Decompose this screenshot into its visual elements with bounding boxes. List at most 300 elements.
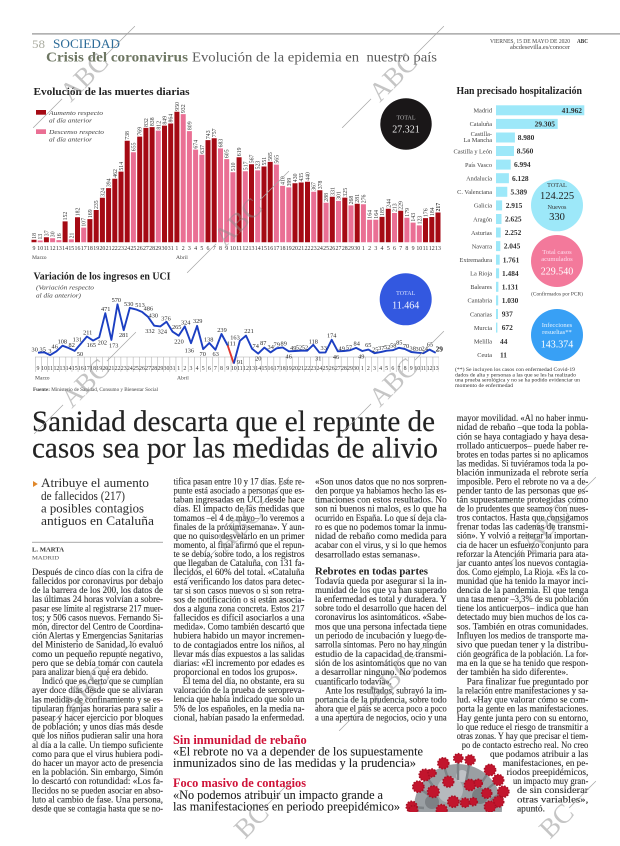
- value labels: 838: [150, 117, 156, 126]
- ICU value labels: 471: [101, 306, 110, 313]
- body column 3: munidad de los que ya han superado: [315, 585, 447, 595]
- body column 1: fallecidos por coronavirus por debajo: [32, 576, 163, 586]
- ICU value labels: 118: [309, 338, 318, 345]
- bar chart: regions: 11: [500, 350, 507, 359]
- value labels: 281: [355, 194, 361, 203]
- date axis: 12: [429, 246, 435, 252]
- date axis: 15: [68, 246, 74, 252]
- body column 1: ción Alertas y Emergencias Sanitarias: [32, 631, 163, 641]
- body column 1: lo descartó con rotundidad: «Los fa-: [32, 776, 163, 786]
- value labels: 637: [200, 145, 206, 154]
- value labels: 325: [343, 188, 349, 197]
- body column 4: Influyen los medios de transporte ma-: [457, 631, 588, 641]
- value labels: 179: [405, 208, 411, 217]
- body column 3: a desarrollar ninguno. No podemos: [315, 667, 447, 677]
- value labels: 523: [256, 161, 262, 169]
- bar chart: regions: 5.389: [510, 187, 527, 196]
- date axis: 15: [261, 246, 267, 252]
- ICU value labels: 530: [124, 301, 133, 308]
- bar chart: regions: Baleares: [470, 284, 493, 291]
- total ICU circle: 11.464: [392, 300, 419, 311]
- ICU date axis: 23: [310, 366, 316, 372]
- value labels: 585: [268, 152, 274, 161]
- value labels: 394: [107, 178, 113, 187]
- ICU value labels: 24: [422, 345, 429, 352]
- callout: foco masivo: [173, 776, 400, 814]
- ICU value labels: 63: [213, 351, 219, 358]
- date axis: 12: [242, 246, 248, 252]
- source: Fuente: Ministerio de Sanidad, Consumo y Bienestar Social: [33, 387, 159, 393]
- date axis: 13: [56, 246, 62, 252]
- ICU value labels: 58: [390, 342, 396, 349]
- body column 4: de lo prudentes que seamos con nues-: [457, 504, 588, 514]
- body column 4: sión». Y volvió a reiterar la importan-: [457, 531, 588, 541]
- ICU value labels: 30: [32, 346, 38, 353]
- ICU value labels: 220: [174, 338, 184, 345]
- ICU date axis: 10: [231, 366, 237, 372]
- ICU date axis: 6: [391, 366, 394, 372]
- value labels: 213: [392, 203, 398, 212]
- ICU date axis: 10: [414, 366, 420, 372]
- ICU date axis: 11: [47, 366, 53, 372]
- watermarks: BC: [533, 797, 580, 844]
- body column 4: ción se haya contagiado y haya desa-: [457, 431, 588, 441]
- body column 4: munidad que ha tenido la mayor inci-: [457, 576, 588, 586]
- ICU value labels: 57: [346, 344, 352, 351]
- ICU value labels: 430: [149, 313, 158, 320]
- date axis: 6: [207, 246, 210, 252]
- value labels: 430: [293, 173, 299, 182]
- ICU date axis: 29: [347, 366, 353, 372]
- value labels: 30: [51, 231, 57, 237]
- note: ICU: (Variación respecto: [36, 285, 95, 292]
- panel: ICU admissions: [32, 272, 443, 393]
- ICU value labels: 89: [281, 340, 287, 347]
- body column 2: punte está asociado a personas que es-: [174, 486, 304, 496]
- body column 4: porta la gente en las manifestaciones.: [457, 704, 588, 714]
- body column 1: ayer doce días desde que se aliviaran: [32, 685, 163, 695]
- section title: Crisis del coronavirus: [46, 50, 189, 66]
- body column 3: Todavía queda por asegurar si la in-: [315, 576, 447, 586]
- ICU date axis: 18: [280, 366, 286, 372]
- value labels: 18: [32, 233, 38, 239]
- watermarks: ABC: [515, 498, 575, 558]
- value labels: 510: [231, 162, 237, 171]
- bar chart: regions: 937: [502, 310, 513, 319]
- value labels: 276: [361, 195, 367, 203]
- body column 4: las medidas. Si tuviéramos toda la po-: [457, 458, 588, 468]
- ICU value labels: 74: [253, 343, 260, 350]
- body column 1: pasar ese límite al registrarse 217 muer-: [32, 603, 163, 613]
- body column 3: ocurrido en España. Lo que sí deja cla-: [315, 513, 447, 523]
- ICU value labels: 211: [83, 330, 92, 337]
- date axis: 23: [311, 246, 317, 252]
- date axis: 29: [348, 246, 354, 252]
- value labels: 123: [417, 216, 423, 224]
- date axis: 25: [130, 246, 136, 252]
- note: ICU: [36, 285, 95, 299]
- ICU value labels: 163: [230, 335, 240, 342]
- circle: total hospitalised: [531, 179, 583, 231]
- subheadline: [33, 476, 154, 528]
- ICU date axis: Abril: [177, 376, 189, 382]
- body column 4: otras zonas. Y hay que precisar el tiem-: [457, 731, 588, 741]
- bar chart: regions: 1.761: [503, 255, 520, 264]
- circle: total cases: [531, 235, 583, 287]
- circle: total hospitalised: TOTAL: [547, 182, 567, 189]
- body column 3: estudio de la capacidad de transmi-: [315, 649, 447, 659]
- bar chart: regions: 8.560: [517, 147, 534, 156]
- date axis: 20: [292, 246, 298, 252]
- ICU value labels: 52: [296, 344, 302, 351]
- date axis: 10: [416, 246, 422, 252]
- watermarks: ABC: [55, 660, 115, 720]
- bar chart: regions: País Vasco: [465, 162, 492, 169]
- body column 3: coronavirus los asintomáticos. «Sabe-: [315, 612, 447, 622]
- body column 4: Para finalizar fue preguntado por: [467, 676, 588, 686]
- bar chart: regions: Canarias: [470, 311, 493, 318]
- header: section bar: ABC: [577, 39, 588, 45]
- icon: coronavirus: [406, 752, 510, 812]
- ICU date axis: 21: [108, 366, 114, 372]
- callout: sin inmunidad: [173, 733, 423, 770]
- body column 4: frenar todas las cadenas de transmi-: [457, 522, 588, 532]
- ICU date axis: 16: [268, 366, 274, 372]
- body column 2: [174, 476, 305, 722]
- bar chart: regions: Navarra: [472, 243, 492, 250]
- ICU value labels: 239: [217, 327, 227, 334]
- value labels: 462: [113, 169, 119, 178]
- body column 1: món, director del Centro de Coordina-: [32, 622, 163, 632]
- body column 2: proporcional en todos los grupos».: [174, 667, 298, 677]
- body column 4: de sin considerar: [517, 785, 588, 795]
- ICU date axis: Marzo: [35, 376, 50, 382]
- ICU value labels: 174: [327, 332, 337, 339]
- bar chart: regions: La Rioja: [470, 271, 492, 278]
- bar chart: regions: 1.484: [502, 269, 519, 278]
- value labels: 301: [336, 191, 342, 200]
- body column 4: der también ha sido diferente».: [457, 667, 568, 677]
- date axis: 28: [342, 246, 348, 252]
- body column 2: que no quiso desvelarlo en un primer: [174, 531, 304, 541]
- panel: hospitalised: [454, 86, 584, 389]
- value labels: 435: [299, 173, 305, 182]
- ICU date axis: 2: [367, 366, 370, 372]
- body column 4: lo que reduce el riesgo de transmitir a: [457, 722, 588, 732]
- bar chart: regions: 6.128: [512, 174, 529, 183]
- date axis: 2: [368, 246, 371, 252]
- ICU value labels: 65: [365, 342, 371, 349]
- value labels: 143: [411, 213, 417, 222]
- legend: Aumento respecto: [48, 110, 104, 117]
- body column 4: dos. Como ejemplo, La Rioja. «Es la co-: [457, 567, 588, 577]
- bar chart: daily deaths: [32, 102, 442, 261]
- legend: Descenso respecto: [48, 129, 105, 136]
- date axis: 13: [249, 246, 254, 252]
- body column 4: mayor movilidad. «Al no haber inmu-: [457, 413, 588, 423]
- icon: arrow: [33, 481, 38, 487]
- ICU value labels: 31: [315, 355, 321, 362]
- body column 2: llecidos, el 60% del total. «Cataluña: [174, 567, 304, 577]
- ICU date axis: 22: [115, 366, 120, 372]
- value labels: 288: [324, 193, 330, 202]
- body column 4: sivo que puedan tener y la distribu-: [457, 640, 588, 650]
- body column 2: días. El impacto de las medidas que: [174, 504, 304, 514]
- value labels: 217: [436, 203, 442, 212]
- ICU date axis: 21: [298, 366, 304, 372]
- ICU date axis: 5: [385, 366, 388, 372]
- ICU value labels: 49: [339, 345, 345, 352]
- ICU date axis: 2: [183, 366, 186, 372]
- body column 2: momento, al final afirmó que el repun-: [174, 540, 304, 550]
- bar chart: regions: 44: [500, 337, 508, 346]
- body column 3: la enfermedad es total y duradera. Y: [315, 594, 447, 604]
- bar chart: regions: Asturias: [471, 230, 493, 237]
- circle: recovered: 143.374: [541, 340, 573, 351]
- body column 1: para analizar bien a qué era debido.: [32, 667, 148, 677]
- note: PCR: (Confirmados por PCR): [531, 291, 583, 298]
- ICU value labels: 202: [98, 340, 107, 347]
- value labels: 932: [181, 104, 187, 113]
- heading: ICU: Variación de los ingresos en UCI: [34, 272, 170, 283]
- body column 4: Hay gente junta pero con su entorno,: [457, 713, 588, 723]
- circle: recovered: resueltas**: [542, 329, 572, 336]
- ICU date axis: 9: [226, 366, 229, 372]
- value labels: 410: [281, 176, 287, 185]
- date axis: 4: [194, 246, 197, 252]
- body column 1: [32, 567, 163, 814]
- ICU value labels: 46: [333, 354, 339, 361]
- body column 2: fallecidos es difícil asociarlos a una: [174, 612, 304, 622]
- ICU date axis: 24: [316, 366, 322, 372]
- ICU date axis: 8: [220, 366, 223, 372]
- date axis: [32, 246, 441, 261]
- ICU value labels: [32, 297, 443, 366]
- body column 4: ción geográfica de la población. La for-: [457, 649, 588, 659]
- value labels: 517: [243, 161, 249, 170]
- body column 2: tifica pasan entre 10 y 17 días. Este re-: [174, 476, 304, 486]
- ICU date axis: 13: [433, 366, 439, 372]
- body column 3: un periodo de incubación y luego de-: [315, 631, 447, 641]
- body column 4: reforzar la Atención Primaria para ata-: [457, 549, 588, 559]
- date axis: 14: [255, 246, 261, 252]
- bar chart: regions: C. Valenciana: [457, 189, 492, 196]
- date axis: 16: [75, 246, 80, 252]
- ICU value labels: 136: [185, 348, 194, 355]
- ICU value labels: 49: [358, 353, 364, 360]
- value labels: 107: [82, 218, 88, 227]
- ICU value labels: 165: [87, 342, 96, 349]
- byline: [32, 542, 163, 562]
- ICU date axis: 27: [145, 366, 151, 372]
- bar chart: regions: Murcia: [474, 325, 492, 332]
- date axis: 22: [112, 246, 118, 252]
- main headline: [32, 406, 438, 465]
- date axis: 23: [118, 246, 124, 252]
- subheadline text: Atribuye el aumento: [41, 476, 149, 490]
- section title: Evolución de la epidemia en nuestro país: [192, 50, 437, 66]
- date axis: 8: [219, 246, 222, 252]
- value labels: 738: [125, 131, 131, 140]
- ICU value labels: 79: [274, 341, 280, 348]
- ICU value labels: 35: [40, 346, 46, 353]
- bar chart: regions: Melilla: [474, 338, 492, 346]
- body column 4: un impacto muy gran-: [513, 776, 588, 786]
- date axis: 7: [213, 246, 216, 252]
- body column 1: de la barrera de los 200, los datos de: [32, 585, 163, 595]
- body column 2: lencia que había indicado que solo un: [174, 694, 305, 704]
- ICU date axis: 12: [243, 366, 249, 372]
- body column 3: ro es que no podemos tomar la inmu-: [315, 522, 447, 532]
- body column 2: te se debía, sobre todo, a los registros: [174, 549, 305, 559]
- ICU value labels: 87: [260, 340, 266, 347]
- ICU value labels: 486: [144, 305, 153, 312]
- body column 1: pasear y hacer ejercicio por bloques: [32, 712, 163, 722]
- value labels: 605: [225, 149, 231, 158]
- value labels: 440: [306, 172, 312, 181]
- ICU value labels: 34: [268, 344, 275, 351]
- date axis: 27: [336, 246, 342, 252]
- ICU date axis: 30: [353, 366, 359, 372]
- bar chart: regions: La Mancha: [464, 137, 492, 144]
- ICU date axis: 14: [66, 366, 72, 372]
- body column 3: son ni buenos ni malos, es lo que ha: [315, 504, 447, 514]
- section title: [46, 50, 437, 66]
- ICU value labels: 33: [321, 345, 327, 352]
- ICU value labels: 20: [255, 356, 261, 363]
- body column 1: tipularan franjas horarias para salir a: [32, 703, 163, 713]
- ICU date axis: 25: [323, 366, 328, 372]
- footnote: [455, 366, 580, 389]
- bar chart: regions: Andalucía: [466, 176, 492, 182]
- body column 3: ahora que el país se acerca poco a poco: [315, 704, 447, 714]
- ICU value labels: 138: [204, 336, 213, 343]
- value labels: 164: [374, 210, 380, 219]
- ICU value labels: 29: [436, 345, 443, 354]
- ICU value labels: 38: [410, 345, 416, 352]
- bar chart: regions: Aragón: [473, 216, 493, 223]
- ICU date axis: 13: [249, 366, 255, 372]
- date axis: 24: [317, 246, 323, 252]
- body column 3: sarrolla síntomas. Pero no hay ningún: [315, 640, 447, 650]
- ICU date axis: 27: [335, 366, 341, 372]
- body column 1: llecidos no se pueden asociar en abso-: [32, 785, 163, 795]
- body column 2: tar si son casos nuevos o si son retra-: [174, 585, 304, 595]
- bar chart: regions: 6.994: [514, 160, 531, 169]
- date axis: 4: [381, 246, 384, 252]
- ICU date axis: 17: [84, 366, 90, 372]
- body column 4: brotes en todas partes si no aplicamos: [457, 449, 589, 459]
- body column 3: sobre todo el desarrollo que hacen del: [315, 603, 447, 613]
- value labels: 229: [399, 201, 405, 210]
- date axis: 22: [305, 246, 310, 252]
- body column 3: timaciones con estos resultados. No: [315, 495, 447, 505]
- body column 1: como para que el virus hubiera podi-: [32, 749, 163, 759]
- body column 2: cional, habían pasado la enfermedad.: [174, 712, 304, 722]
- date axis: Marzo: [32, 255, 47, 261]
- date axis: 5: [387, 246, 390, 252]
- bar chart: regions: Cataluña: [470, 121, 492, 128]
- ICU date axis: 12: [53, 366, 59, 372]
- value labels: 331: [330, 187, 336, 196]
- date axis: 6: [393, 246, 396, 252]
- value labels: 152: [63, 212, 69, 220]
- date axis: 30: [354, 246, 360, 252]
- ICU date axis: 14: [255, 366, 261, 372]
- line chart: ICU: [32, 297, 443, 382]
- ICU date axis: 24: [127, 366, 133, 372]
- date axis: 19: [286, 246, 292, 252]
- ICU value labels: 50: [77, 351, 83, 358]
- ICU value labels: 25: [372, 347, 378, 354]
- date axis: 3: [374, 246, 377, 252]
- body column 2: 5% de los españoles, en la media na-: [174, 703, 304, 713]
- value labels: 812: [156, 121, 162, 130]
- body column 4: lud. «Hay que valorar cómo se com-: [457, 695, 588, 705]
- legend: al día anterior: [49, 118, 92, 125]
- body column 1: Después de cinco días con la cifra de: [32, 567, 163, 577]
- body column 2: llevar más días expuestos a las salidas: [174, 649, 305, 659]
- ICU value labels: 108: [58, 339, 67, 346]
- date axis: 11: [236, 246, 242, 252]
- date axis: 11: [44, 246, 49, 252]
- value labels: 21: [69, 233, 75, 238]
- body column 4: tros contactos. Hasta que consigamos: [457, 513, 589, 523]
- callout: foco masivo: las manifestaciones en periodo preepidémico»: [173, 800, 400, 814]
- ICU value labels: 329: [193, 318, 202, 325]
- value labels: 244: [386, 199, 392, 208]
- footnote: dados de alta y personas a las que se les ha realizado: [455, 372, 576, 378]
- ICU date axis: 6: [208, 366, 211, 372]
- date axis: 10: [230, 246, 236, 252]
- body column 1: de población; y unos días más desde: [32, 722, 163, 732]
- ICU date axis: 13: [60, 366, 66, 372]
- callout: sin inmunidad: «El rebrote no va a depender de los supuestamente: [173, 745, 423, 759]
- date axis: 7: [399, 246, 402, 252]
- value labels: 514: [119, 162, 125, 171]
- body column 1: do hacer un mayor acto de presencia: [32, 758, 163, 768]
- ICU value labels: 52: [384, 344, 390, 351]
- value labels: 378: [318, 181, 324, 189]
- ICU date axis: 29: [157, 366, 163, 372]
- ICU value labels: 332: [145, 328, 155, 335]
- body column 1: tos; y 506 casos nuevos. Fernando Si-: [32, 612, 163, 622]
- bar chart: regions: Ceuta: [477, 352, 492, 359]
- ICU date axis: 11: [421, 366, 426, 372]
- body column 4: po de contacto estrecho real. No creo: [462, 740, 589, 750]
- bar chart: regions: Galicia: [474, 203, 492, 210]
- bar chart: regions: 1.030: [502, 296, 519, 305]
- ICU date axis: 31: [170, 366, 176, 372]
- watermarks: ABC: [208, 192, 268, 252]
- bar chart: regions: 8.980: [518, 133, 535, 142]
- total deaths circle: [380, 98, 432, 150]
- body column 2: diarias: «El incremento por edades es: [174, 658, 305, 668]
- value labels: 13: [38, 234, 44, 240]
- ICU date axis: 9: [37, 366, 40, 372]
- note: ICU: al día anterior): [36, 292, 81, 299]
- bar chart: regions: 2.045: [504, 242, 521, 251]
- total ICU circle: TOTAL: [396, 291, 416, 297]
- ICU date axis: 1: [361, 366, 364, 372]
- circle: recovered: [531, 309, 583, 361]
- body column 3: sión de los asintomáticos que no van: [315, 658, 447, 668]
- body column 3: [315, 476, 447, 722]
- ICU value labels: 85: [396, 339, 402, 346]
- footnote: momento de enfermedad: [455, 382, 513, 389]
- body column 4: pender tanto de las personas que es-: [457, 486, 588, 496]
- bar chart: regions: 2.625: [505, 215, 522, 224]
